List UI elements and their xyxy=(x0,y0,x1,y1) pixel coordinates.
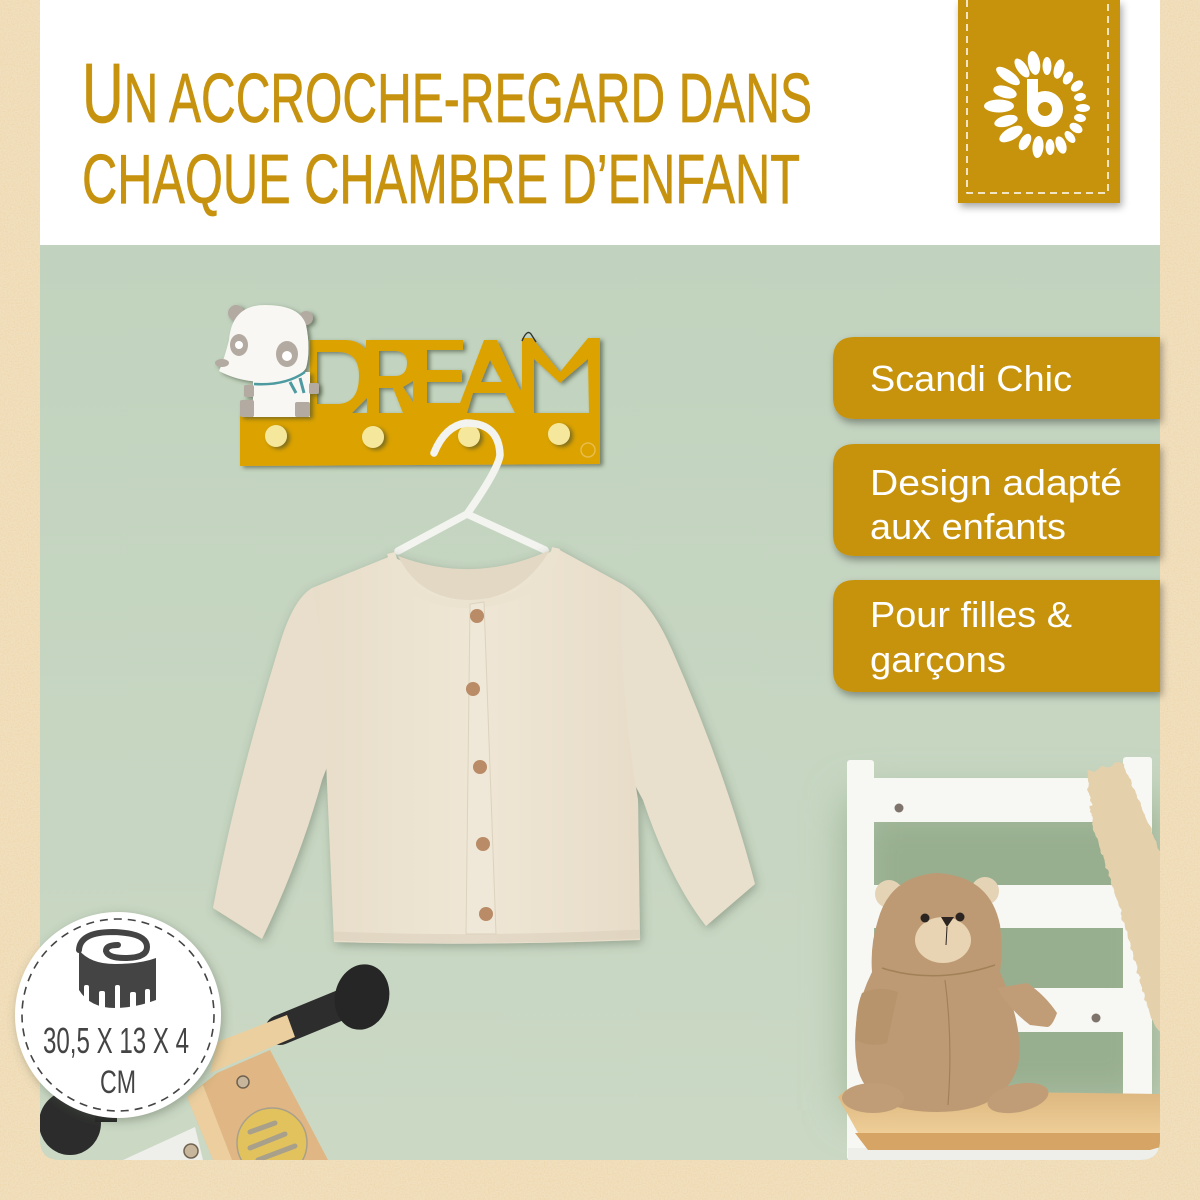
bike yellow badge xyxy=(236,1107,308,1160)
bike grip xyxy=(280,1000,353,1030)
bike bolts xyxy=(237,1076,249,1088)
dimensions text: 30,5 X 13 X 4 xyxy=(43,1020,189,1061)
feature pill: Design adapté aux enfants: aux enfants xyxy=(870,506,1066,547)
chair with plush bear xyxy=(838,757,1165,1160)
cardigan inner neck xyxy=(398,550,550,600)
cardigan placket xyxy=(466,602,496,934)
feature pill: Scandi Chic xyxy=(833,337,1160,419)
feature pill: Pour filles & garçons: garçons xyxy=(870,639,1006,680)
chair screws xyxy=(894,804,904,812)
feature pill: Design adapté aux enfants: Design adapté xyxy=(870,462,1122,503)
bike grip cap xyxy=(336,964,390,1030)
seat top xyxy=(838,1090,1160,1133)
fluffy blanket xyxy=(1087,763,1165,1040)
cardigan body xyxy=(312,548,640,944)
coat rack xyxy=(215,305,600,466)
bike handlebar wood xyxy=(210,1015,295,1073)
hanging wire xyxy=(522,333,536,342)
feature pill: Design adapté aux enfants xyxy=(833,444,1160,556)
title xyxy=(82,46,812,218)
bike wooden frame xyxy=(187,1050,328,1160)
photo scene xyxy=(39,245,1165,1178)
bike front wheel xyxy=(39,1091,101,1155)
feature pill: Scandi Chic: Scandi Chic xyxy=(870,358,1072,399)
bike white plate xyxy=(123,1127,203,1160)
header panel xyxy=(40,0,1160,245)
cardigan buttons xyxy=(466,609,493,921)
icon: measuring tape xyxy=(79,932,156,1012)
brand tag xyxy=(958,0,1120,203)
white lower edge xyxy=(848,1148,1160,1160)
size badge: CM xyxy=(100,1064,136,1100)
cardigan xyxy=(213,548,755,944)
feature pill: Pour filles & garçons: Pour filles & xyxy=(870,594,1072,635)
size badge xyxy=(15,912,221,1118)
cardigan left sleeve xyxy=(212,588,327,944)
balance bike xyxy=(40,964,390,1160)
rack knobs xyxy=(265,423,570,448)
clothes hanger xyxy=(398,423,545,551)
seat front xyxy=(855,1133,1160,1150)
small logo on rack xyxy=(581,443,595,457)
darker wall behind chair xyxy=(850,800,1160,1110)
title: CHAQUE CHAMBRE D’ENFANT xyxy=(82,140,800,218)
plush bear xyxy=(842,873,1057,1118)
title: UN ACCROCHE-REGARD DANS xyxy=(82,46,812,140)
icon: brand flower logo xyxy=(984,50,1090,158)
panda figure xyxy=(215,305,319,417)
cardigan collar xyxy=(387,547,560,559)
cardigan hem xyxy=(334,934,640,939)
cardigan right sleeve xyxy=(600,584,755,926)
chair back xyxy=(847,757,1152,1160)
feature pill: Pour filles & garçons xyxy=(833,580,1160,692)
